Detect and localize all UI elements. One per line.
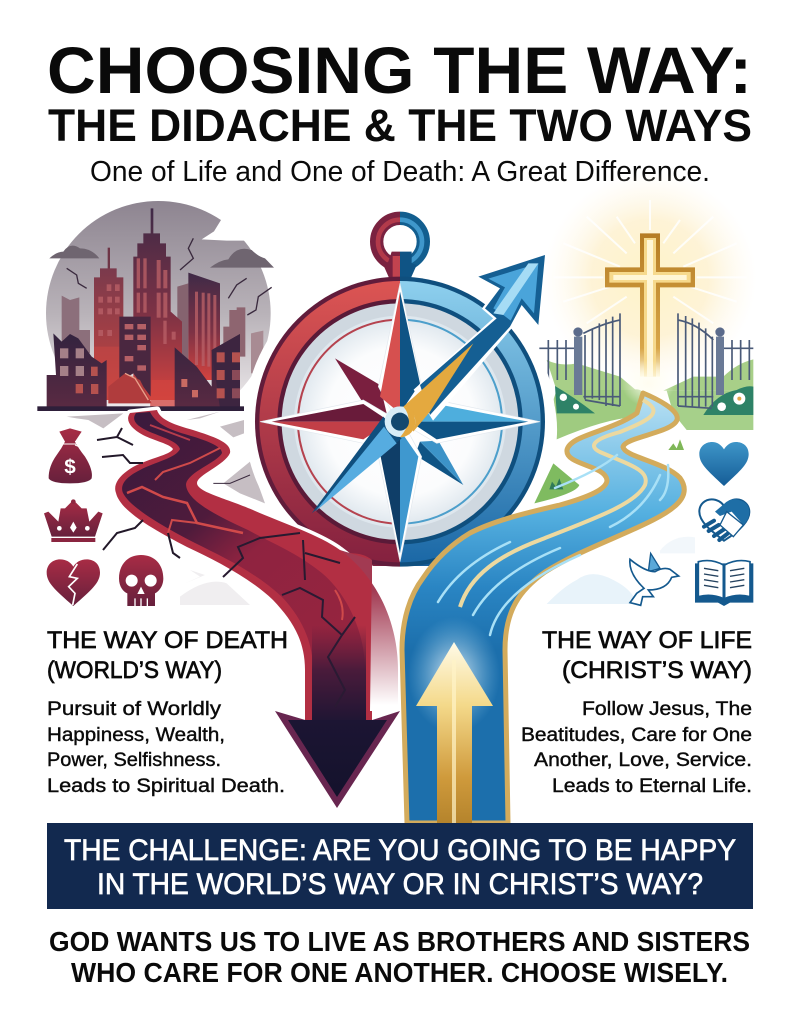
icon: money bag: $	[64, 455, 76, 478]
text: way of life description: Follow Jesus, The	[582, 699, 752, 720]
heading: way of death: (WORLD’S WAY)	[47, 657, 222, 684]
arrow: way of life	[416, 642, 493, 823]
compass	[245, 218, 555, 577]
illustration: ruined city	[37, 201, 274, 605]
text: way of death description: Pursuit of Worldly	[47, 699, 222, 720]
gates	[539, 313, 753, 408]
illustration: sunrise cross and gates	[534, 172, 757, 606]
challenge banner	[47, 823, 753, 909]
heading: way of life	[542, 627, 752, 684]
book icon	[695, 561, 753, 606]
title: CHOOSING THE WAY:	[47, 33, 752, 107]
text: way of death description	[47, 699, 285, 797]
road cracks	[97, 425, 355, 707]
heart icon	[699, 442, 749, 486]
text: way of death description: Leads to Spiritual Death.	[47, 776, 285, 797]
tagline: One of Life and One of Death: A Great Difference.	[90, 156, 710, 188]
text: way of life description	[521, 699, 752, 797]
heading: way of life: (CHRIST’S WAY)	[562, 657, 752, 684]
icon: skull	[119, 555, 163, 606]
icon: crown	[44, 499, 103, 542]
icon: money bag	[49, 428, 92, 483]
compass body	[255, 277, 545, 567]
river: way of life	[402, 393, 684, 823]
road: way of death	[97, 410, 400, 808]
challenge banner: THE CHALLENGE: ARE YOU GOING TO BE HAPPY	[64, 834, 736, 867]
text: way of death description: Power, Selfishness.	[47, 750, 221, 771]
handshake icon	[699, 499, 749, 541]
compass star	[260, 283, 540, 562]
heading: way of life: THE WAY OF LIFE	[542, 627, 752, 654]
cross	[605, 233, 695, 377]
text: way of death description: Happiness, Wealth,	[47, 725, 225, 746]
direction arrow	[312, 255, 545, 513]
text: way of life description: Another, Love, Service.	[534, 750, 752, 771]
closing message	[49, 926, 750, 988]
icon: broken heart	[47, 559, 100, 606]
arrowhead: way of death	[275, 711, 400, 808]
heading: way of death: THE WAY OF DEATH	[47, 627, 288, 654]
dove icon	[630, 553, 679, 605]
heading: way of death	[47, 627, 288, 684]
closing message: GOD WANTS US TO LIVE AS BROTHERS AND SISTERS	[49, 926, 750, 957]
compass ring and stem	[377, 218, 423, 280]
closing message: WHO CARE FOR ONE ANOTHER. CHOOSE WISELY.	[71, 957, 728, 988]
text: way of life description: Leads to Eternal Life.	[552, 776, 752, 797]
subtitle: THE DIDACHE & THE TWO WAYS	[48, 100, 752, 151]
text: way of life description: Beatitudes, Care for One	[521, 725, 752, 746]
challenge banner: IN THE WORLD’S WAY OR IN CHRIST’S WAY?	[97, 868, 703, 901]
